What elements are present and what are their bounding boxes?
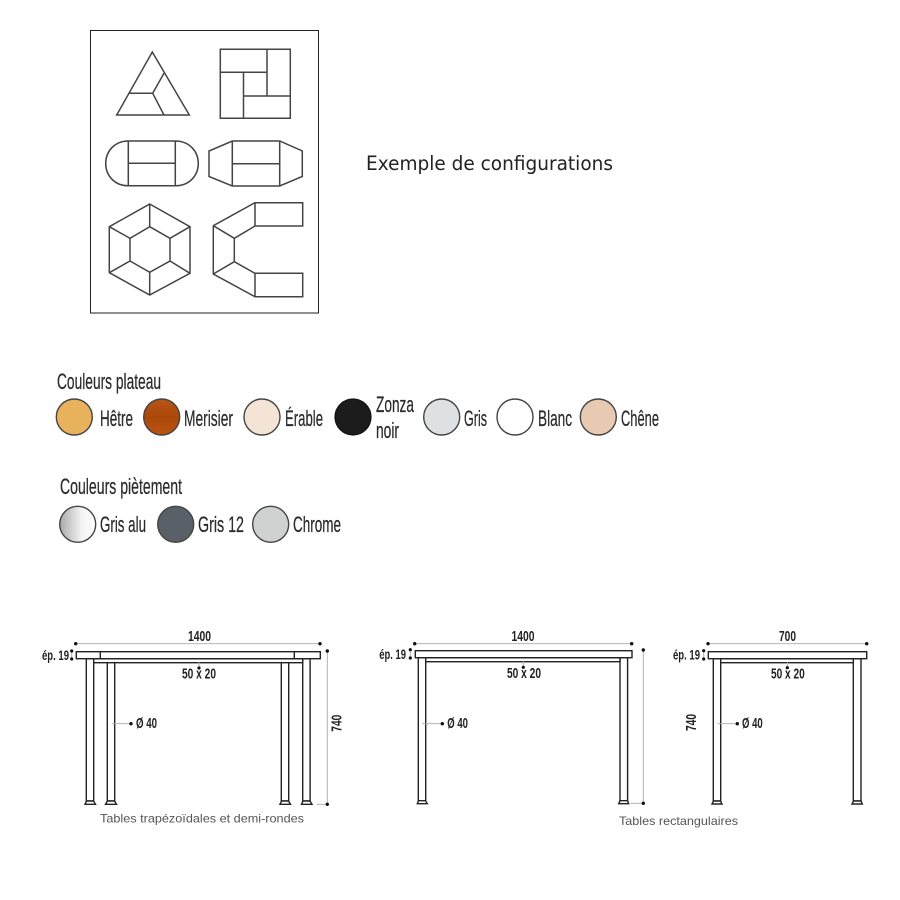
table top and apron xyxy=(415,651,632,662)
swatch: Blanc: Blanc xyxy=(538,406,572,431)
dimension: leg Ø 40 xyxy=(717,715,763,732)
swatch: Chêne: Chêne xyxy=(621,406,659,431)
table top and apron xyxy=(708,652,867,663)
dimension: rail 50 x 20: 50 x 20 xyxy=(507,665,541,682)
dimension: rail 50 x 20 xyxy=(507,661,541,682)
diagram: table rectangulaire 1400 xyxy=(379,628,645,805)
table top and apron xyxy=(76,652,320,663)
dimension: width 1400: 1400 xyxy=(512,628,534,645)
diagram: triangle configuration xyxy=(117,52,189,115)
table legs xyxy=(712,659,862,804)
heading: Couleurs piètement: Couleurs piètement xyxy=(60,474,182,499)
caption: tables trapézoïdales et demi-rondes: Tables trapézoïdales et demi-rondes xyxy=(100,812,304,826)
caption: tables rectangulaires: Tables rectangulaires xyxy=(619,814,738,828)
dimension: thickness ép. 19: ép. 19 xyxy=(379,646,406,662)
dimension: rail 50 x 20 xyxy=(771,662,805,683)
swatch: Gris alu: Gris alu xyxy=(100,512,146,537)
dimension: leg Ø 40: Ø 40 xyxy=(136,715,157,732)
table legs xyxy=(85,659,312,804)
panel: configurations frame xyxy=(90,30,318,313)
table legs xyxy=(417,658,629,804)
swatch: Zonza noir: noir xyxy=(376,418,399,443)
dimension: thickness ép. 19: ép. 19 xyxy=(42,647,69,663)
diagram: stadium configuration xyxy=(106,141,198,186)
dimension: width 1400 xyxy=(413,628,633,645)
swatch: Gris 12 xyxy=(158,506,244,542)
swatch: Merisier: Merisier xyxy=(184,406,233,431)
dimension: height 740 xyxy=(317,649,346,806)
dimension: rail 50 x 20: 50 x 20 xyxy=(771,666,805,683)
swatch: Merisier xyxy=(144,399,233,435)
dimension: leg Ø 40: Ø 40 xyxy=(447,715,468,732)
dimension: width 1400: 1400 xyxy=(188,628,211,645)
dimension: rail 50 x 20: 50 x 20 xyxy=(182,666,216,683)
panel: couleurs piètement xyxy=(60,474,341,542)
swatch: Chrome xyxy=(253,506,341,542)
diagram: trapezoid configuration xyxy=(209,141,302,186)
dimension: leg Ø 40 xyxy=(112,715,157,732)
heading: Couleurs plateau: Couleurs plateau xyxy=(57,369,161,394)
dimension: width 700 xyxy=(706,628,868,645)
dimension: thickness ép. 19: ép. 19 xyxy=(673,647,700,663)
swatch: Hêtre xyxy=(56,399,133,435)
dimension: rail 50 x 20 xyxy=(182,662,216,683)
dimension: width 700: 700 xyxy=(779,628,796,645)
swatch: Gris 12: Gris 12 xyxy=(198,512,244,537)
swatch: Chrome: Chrome xyxy=(293,512,341,537)
diagram: C-shape configuration xyxy=(213,203,303,297)
dimension: leg Ø 40 xyxy=(422,715,468,732)
dimension: height line xyxy=(631,648,645,805)
swatch: Hêtre: Hêtre xyxy=(100,406,133,431)
swatch: Érable: Érable xyxy=(285,406,323,431)
dimension: height 740: 740 xyxy=(329,715,346,732)
swatch: Gris xyxy=(424,399,487,435)
swatch: Blanc xyxy=(497,399,572,435)
swatch: Zonza noir: Zonza xyxy=(376,392,414,417)
swatch: Chêne xyxy=(580,399,659,435)
dimension: height 740: 740 xyxy=(683,714,700,731)
swatch: Érable xyxy=(244,399,323,435)
diagram: square configuration xyxy=(220,49,290,118)
heading: Exemple de configurations: Exemple de configurations xyxy=(366,152,613,175)
diagram: hexagon configuration xyxy=(109,204,190,295)
dimension: leg Ø 40: Ø 40 xyxy=(742,715,763,732)
swatch: Gris alu xyxy=(60,506,146,542)
swatch: Zonza noir xyxy=(335,392,414,443)
diagram: table rectangulaire 700 xyxy=(673,628,868,804)
diagram: table trapézoïdale et demi-ronde xyxy=(42,628,346,806)
swatch: Gris: Gris xyxy=(464,406,487,431)
panel: couleurs plateau xyxy=(56,369,659,443)
dimension: width 1400 xyxy=(74,628,322,645)
